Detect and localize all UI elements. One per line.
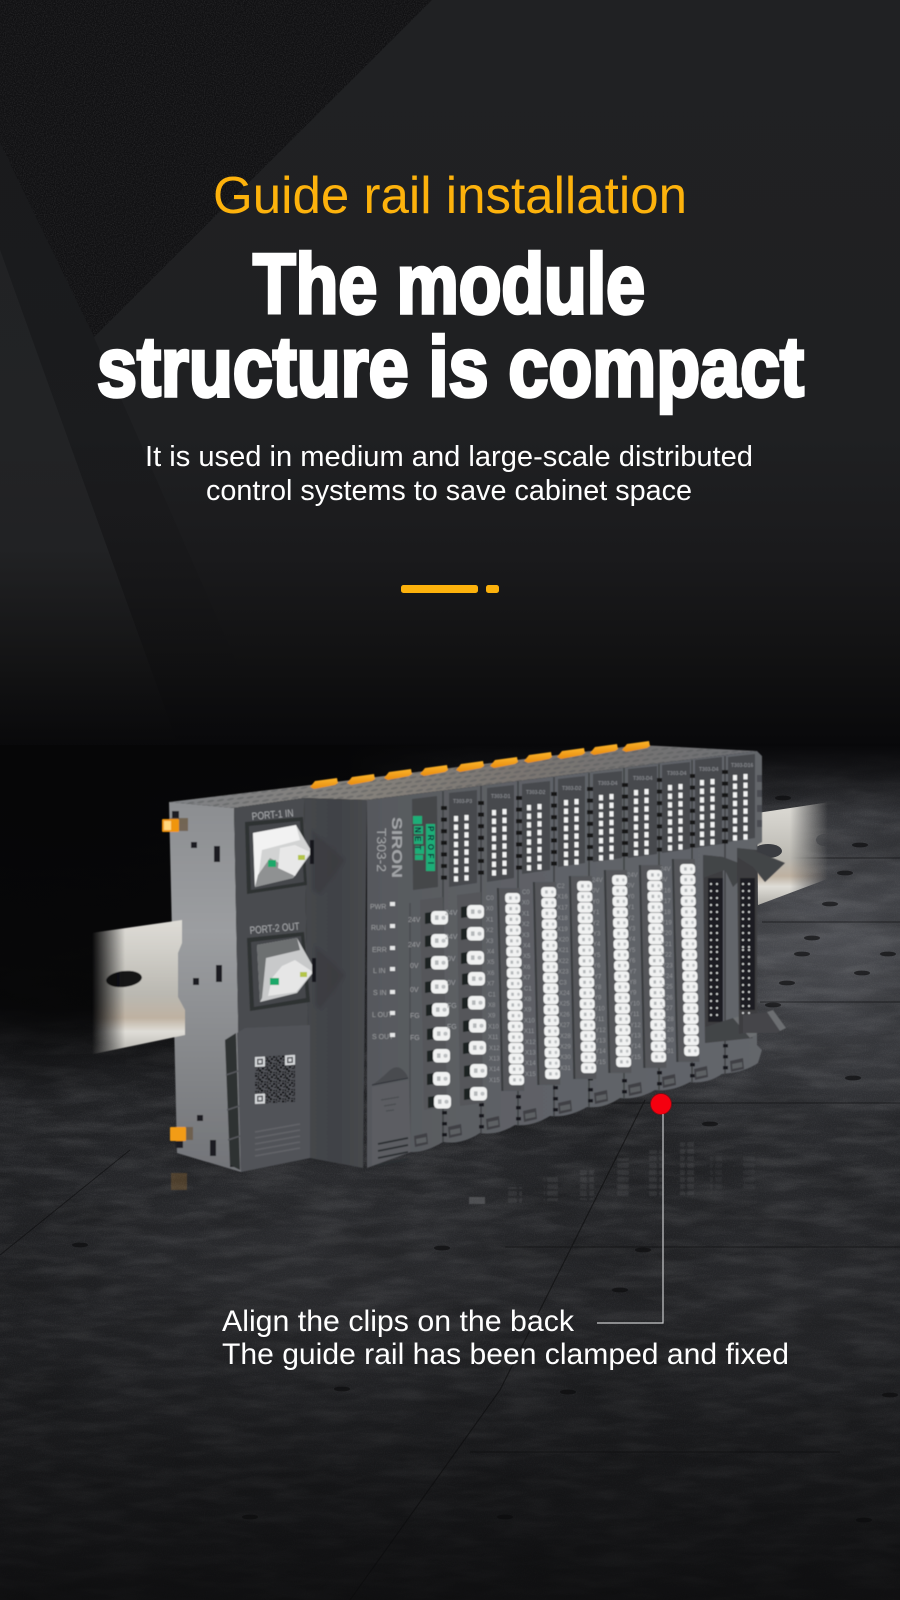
signal terminal labels: X6 [487,971,495,977]
signal terminal labels: X8 [488,1003,496,1009]
main title: The module [253,237,645,331]
signal terminal labels: Y3 [628,926,636,932]
signal terminal labels: X14 [489,1067,500,1073]
lower cover with QR code and vents [225,1025,310,1172]
signal terminal labels: Y26 [662,995,673,1001]
power terminal labels: 24V [408,942,421,949]
main title [97,237,804,414]
status window: PROFINET: PROFI [426,826,435,867]
ethernet port 1 [245,817,314,894]
signal terminal labels: X24 [559,991,570,997]
accent bars [401,585,499,593]
small orange side clip: bottom [170,1127,193,1141]
signal terminal labels: Y27 [662,1006,673,1012]
power terminal labels: FG [447,1003,457,1010]
signal terminal labels: X27 [559,1023,570,1029]
signal terminal labels: 0V [592,889,599,895]
signal terminal labels: X5 [487,960,495,966]
signal terminal labels: Y0 [627,894,635,900]
callout text: The guide rail has been clamped and fixed [222,1338,789,1371]
signal terminal labels: X21 [558,948,569,954]
signal terminal labels [486,867,674,1084]
divider teeth [441,770,728,1136]
subtitle: It is used in medium and large-scale distributed [145,441,753,473]
signal terminal labels: Y12 [595,1028,606,1034]
signal terminal labels: Y9 [629,991,637,997]
signal terminal labels: Y20 [661,931,672,937]
signal terminal labels: Y16 [660,888,671,894]
signal terminal labels: X4 [487,950,495,956]
signal terminal labels: X0 [522,901,530,907]
signal terminal labels: X3 [486,939,494,945]
status windows with LED columns [449,754,755,887]
module front faces with scalloped bottom [367,751,762,1168]
background: concrete floor [0,750,900,1600]
signal terminal labels: Y1 [592,910,600,916]
power terminal bay 1 [420,897,451,1110]
signal terminal labels: X26 [559,1012,570,1018]
status LED labels: L IN [373,968,386,975]
signal terminal labels: X15 [525,1072,536,1078]
power terminal labels [408,910,458,1042]
background: upper dark gradient [0,0,900,750]
subtitle: control systems to save cabinet space [206,475,692,507]
brand and model text: T303-2 [374,828,389,872]
status windows with LED columns: T303-D2 [526,790,546,796]
callout text [222,1305,789,1371]
power terminal labels: 0V [447,956,456,963]
signal terminal labels: C3 [559,980,567,986]
status LED labels: L OUT [372,1012,393,1019]
signal terminal labels: 0V [627,884,634,890]
status LED labels: RUN [371,925,386,932]
signal terminal labels: Y6 [593,964,601,970]
top face with ventilation holes [169,745,757,808]
signal terminal labels: Y9 [594,996,602,1002]
signal terminal labels: X2 [486,928,494,934]
small orange side clip: top [162,818,188,832]
power terminal labels: 24V [408,917,421,924]
port panel face [234,798,310,1172]
signal terminal labels: Y22 [661,953,672,959]
signal terminal labels: Y10 [594,1006,605,1012]
DIN guide rail: right segment [757,803,826,905]
signal terminal labels: Y24 [662,974,673,980]
signal terminal labels: Y15 [595,1060,606,1066]
main title: structure is compact [97,320,804,414]
status LED labels: PWR [370,904,386,911]
power terminal labels: 0V [447,980,456,987]
port label: PORT-2 OUT: PORT-2 OUT [249,921,301,937]
ribbon connector 1 [703,855,757,1043]
signal terminal labels: Y4 [628,937,636,943]
signal terminal labels: Y19 [661,920,672,926]
signal terminal labels: X18 [557,916,568,922]
signal terminal labels: X9 [488,1014,496,1020]
signal terminal labels: Y5 [593,953,601,959]
signal terminal labels: C0 [522,890,530,896]
signal terminal labels: X6 [523,965,531,971]
background: left shade band [0,250,180,750]
signal terminal labels: X16 [557,895,568,901]
port label: PORT-1 IN: PORT-1 IN [251,807,294,823]
power terminal labels: 24V [445,910,458,917]
signal terminal labels: X28 [560,1034,571,1040]
signal terminal labels: X0 [486,907,494,913]
signal terminal labels: Y31 [663,1049,674,1055]
ribbon connector 2 [737,848,786,1034]
status window: PROFINET [412,796,438,890]
signal terminal column 6 [672,859,699,1062]
signal terminal labels: 24V [592,878,603,884]
module dividers [410,756,725,1152]
side panel [169,802,241,1172]
signal terminal labels: X1 [486,917,494,923]
signal terminal labels: Y2 [627,916,635,922]
signal terminal labels: C1 [524,986,532,992]
callout text: Align the clips on the back [222,1305,575,1338]
signal terminal labels: X13 [489,1056,500,1062]
signal terminal labels: X17 [557,905,568,911]
status windows with LED columns: T303-D4 [633,776,653,782]
signal terminal labels: X7 [487,982,495,988]
signal terminal column 5 [639,865,666,1068]
signal terminal labels: Y7 [629,969,637,975]
signal terminal labels: Y7 [594,974,602,980]
brand and model text [374,817,405,878]
signal terminal column 4 [604,870,631,1073]
power terminal labels: FG [410,1035,420,1042]
signal terminal labels: X2 [522,922,530,928]
signal terminal labels: X4 [523,944,531,950]
signal terminal labels: X14 [525,1061,536,1067]
signal terminal labels: Y23 [662,963,673,969]
signal terminal labels: X30 [560,1055,571,1061]
signal terminal labels: Y10 [629,1001,640,1007]
signal terminal labels: Y17 [660,899,671,905]
power terminal labels: FG [410,1013,420,1020]
signal terminal labels: C2 [557,884,565,890]
status windows with LED columns: T303-D2 [562,786,582,792]
signal terminal labels: Y8 [594,985,602,991]
power terminal labels: FG [447,1024,457,1031]
background: left light band [0,143,275,750]
signal terminal labels: Y18 [660,910,671,916]
power terminal labels: 0V [410,963,419,970]
signal terminal labels: X22 [558,959,569,965]
power terminal bay 2 [457,892,487,1106]
signal terminal labels: X15 [489,1078,500,1084]
ethernet port 2 [247,932,316,1011]
signal terminal labels: X3 [522,933,530,939]
subtitle [145,441,753,507]
signal terminal column 3 [569,876,596,1079]
callout: leader line [597,1114,663,1323]
product reflection on the floor [171,1142,756,1205]
status LED labels: S OUT [372,1034,394,1041]
signal terminal labels: Y14 [630,1044,641,1050]
signal terminal labels: 0V [660,878,667,884]
signal terminal labels: Y6 [628,959,636,965]
signal terminal labels: Y8 [629,980,637,986]
signal terminal labels: X12 [525,1040,536,1046]
signal terminal labels: C1 [488,992,496,998]
signal terminal column 1 [497,888,524,1091]
signal terminal labels: X11 [488,1035,499,1041]
signal terminal labels: Y30 [663,1038,674,1044]
signal terminal labels: X9 [524,1008,532,1014]
signal terminal labels: Y0 [592,899,600,905]
signal terminal labels: Y11 [629,1012,640,1018]
signal terminal labels: X20 [558,938,569,944]
signal terminal labels: X29 [560,1044,571,1050]
signal terminal labels: Y13 [595,1038,606,1044]
hinged lower cover [372,1067,411,1166]
signal terminal labels: Y1 [627,905,635,911]
signal terminal labels: X23 [558,970,569,976]
right side tabs [757,775,762,827]
background: textured dark triangle [0,0,432,337]
brand and model text: SIRON [388,817,405,878]
port shadows [312,830,345,1010]
status windows with LED columns: T303-D4 [699,767,719,773]
module feet [414,1058,744,1147]
status windows with LED columns: T303-D1 [491,794,511,800]
DIN guide rail: left segment [84,920,185,1056]
signal terminal labels: X10 [524,1018,535,1024]
signal terminal labels: Y13 [630,1034,641,1040]
signal terminal labels: X12 [489,1046,500,1052]
signal terminal labels: Y11 [594,1017,605,1023]
signal terminal labels: Y25 [662,985,673,991]
eyebrow heading: Guide rail installation [213,167,687,225]
status windows with LED columns: T303-D4 [598,781,618,787]
signal terminal labels: Y2 [592,921,600,927]
signal terminal column 2 [533,882,560,1085]
status LED labels: S IN [373,990,387,997]
status windows with LED columns: T303-D16 [731,763,753,769]
status LED labels [370,902,395,1041]
signal terminal labels: X7 [523,976,531,982]
orange top clips [310,741,650,789]
status windows with LED columns: T303-D4 [667,771,687,777]
signal terminal labels: X5 [523,954,531,960]
signal terminal labels: Y14 [595,1049,606,1055]
signal terminal labels: Y4 [593,942,601,948]
power terminal labels: 24V [445,934,458,941]
signal terminal labels: X8 [524,997,532,1003]
power terminal labels: 0V [410,987,419,994]
signal terminal labels: Y21 [661,942,672,948]
signal terminal labels: X1 [522,911,530,917]
signal terminal labels: Y3 [593,932,601,938]
shadowed middle face [304,798,367,1168]
signal terminal labels: X25 [559,1002,570,1008]
signal terminal labels: 24V [627,873,638,879]
signal terminal labels: X10 [488,1024,499,1030]
signal terminal labels: Y29 [663,1028,674,1034]
product: SIRON T303-2 distributed I/O module stack [84,741,786,1172]
signal terminal labels: Y28 [663,1017,674,1023]
signal terminal labels: 24V [660,867,671,873]
signal terminal labels: X11 [524,1029,535,1035]
status window: PROFINET: NET [413,827,422,853]
status LED labels: ERR [372,947,387,954]
signal terminal labels: Y12 [630,1023,641,1029]
signal terminal labels: X19 [557,927,568,933]
signal terminal labels: Y15 [630,1055,641,1061]
signal terminal labels: Y5 [628,948,636,954]
callout: marker dot [650,1094,672,1114]
signal terminal labels: X13 [525,1050,536,1056]
status windows with LED columns: T303-P3 [453,799,472,805]
signal terminal labels: C0 [486,896,494,902]
signal terminal labels: X31 [560,1066,571,1072]
